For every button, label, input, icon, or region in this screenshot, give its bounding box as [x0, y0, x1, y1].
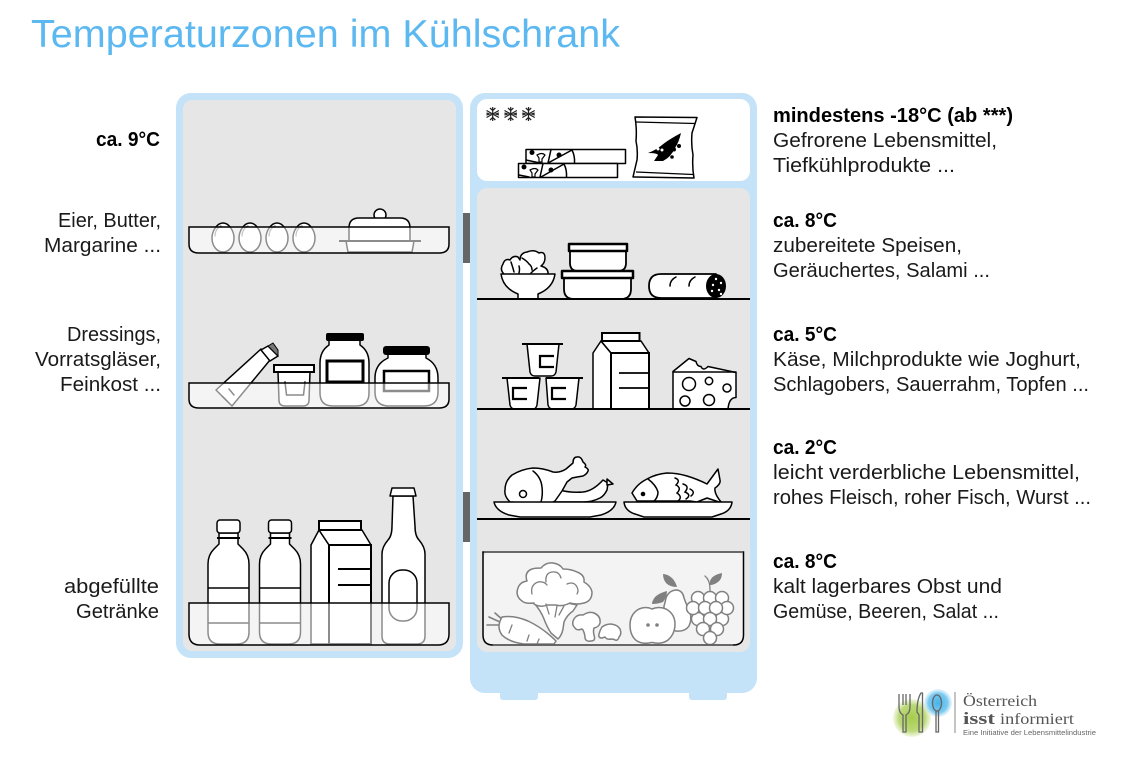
icon: yoghurt cups	[502, 344, 583, 409]
icon: carrot	[487, 613, 556, 644]
text block: dressings label	[35, 324, 161, 396]
text block: dressings label: Vorratsgläser,	[35, 349, 161, 371]
shelf tray	[189, 603, 449, 645]
shelf tray	[189, 383, 449, 408]
text block: drinks label: abgefüllte	[64, 576, 159, 598]
text block: vegetable drawer 8C: Gemüse, Beeren, Salat ...	[773, 601, 999, 623]
text block: freezer: mindestens -18°C (ab ***)	[773, 105, 1013, 127]
text block: vegetable drawer 8C: kalt lagerbares Obst und	[773, 576, 1002, 598]
logo: Österreich isst informiert: isst	[963, 709, 995, 728]
icon: bottle 1	[208, 520, 249, 644]
icon: mushrooms	[573, 612, 621, 641]
icon: food containers	[562, 244, 633, 299]
panel: fridge body	[470, 93, 757, 700]
text block: middle shelf 5C	[773, 324, 1089, 396]
text block: middle shelf 5C: Schlagobers, Sauerrahm, Topfen ...	[773, 374, 1089, 396]
icon: fish on plate	[624, 469, 732, 517]
text block: door zone 9C: ca. 9°C	[96, 129, 160, 151]
panel: fridge door	[176, 93, 463, 658]
icon: frozen pizza boxes	[518, 150, 626, 178]
text block: top shelf 8C	[773, 210, 990, 282]
shelf line: meat zone 2C	[477, 518, 750, 520]
text block: lower shelf 2C: leicht verderbliche Lebensmittel,	[773, 462, 1080, 484]
icon: milk carton	[593, 333, 649, 409]
icon: broccoli	[517, 563, 592, 639]
logo: Österreich isst informiert: Österreich	[963, 692, 1037, 710]
icon: jar tall	[320, 333, 369, 406]
text block: eggs and butter label: Eier, Butter,	[58, 210, 161, 232]
text block: freezer: Tiefkühlprodukte ...	[773, 155, 955, 177]
text block: top shelf 8C: Geräuchertes, Salami ...	[773, 260, 990, 282]
title: Temperaturzonen im Kühlschrank	[31, 13, 620, 56]
icon: glass bottle	[382, 488, 425, 644]
text block: dressings label: Dressings,	[67, 324, 161, 346]
icon: tube	[216, 343, 278, 406]
icon: milk carton	[311, 521, 371, 644]
icon: butter dish	[339, 209, 421, 252]
text block: middle shelf 5C: Käse, Milchprodukte wie Joghurt,	[773, 349, 1081, 371]
icon: meat on plate	[494, 457, 616, 517]
logo: Österreich isst informiert: Eine Initiative der Lebensmittelindustrie	[963, 728, 1096, 737]
icon: cup	[274, 365, 314, 406]
text block: eggs and butter label	[44, 210, 161, 257]
icon: door hinges	[463, 213, 470, 542]
icon: salad bowl	[501, 251, 555, 299]
icon: frozen peas bag	[633, 117, 697, 178]
icon: cheese	[673, 358, 736, 409]
text block: vegetable drawer 8C	[773, 551, 1002, 623]
text block: lower shelf 2C	[773, 437, 1091, 509]
logo: Österreich isst informiert	[893, 689, 1096, 737]
icon: salami	[649, 274, 726, 298]
text block: eggs and butter label: Margarine ...	[44, 235, 161, 257]
drawer front	[483, 552, 744, 645]
text block: top shelf 8C: ca. 8°C	[773, 210, 837, 232]
text block: drinks label: Getränke	[76, 601, 159, 623]
icon: jar wide	[375, 346, 438, 406]
icon: bottle 2	[260, 520, 300, 644]
text block: lower shelf 2C: rohes Fleisch, roher Fisch, Wurst ...	[773, 487, 1091, 509]
icon: grapes	[686, 573, 734, 644]
text block: top shelf 8C: zubereitete Speisen,	[773, 235, 962, 257]
logo: Österreich isst informiert: informiert	[1000, 711, 1075, 728]
text block: middle shelf 5C: ca. 5°C	[773, 324, 837, 346]
text block: drinks label	[64, 576, 159, 623]
shelf line: cold zone 8C	[477, 298, 750, 300]
shelf 2: tube, cup, jars	[189, 333, 449, 408]
text block: dressings label: Feinkost ...	[60, 374, 161, 396]
text block: freezer: Gefrorene Lebensmittel,	[773, 130, 997, 152]
shelf tray	[189, 227, 449, 253]
icon: apple	[630, 608, 675, 643]
text block: freezer	[773, 105, 1013, 177]
shelf 3: drinks	[189, 488, 449, 645]
icon: freezer snowflakes	[486, 107, 535, 121]
shelf line: dairy zone 5C	[477, 408, 750, 410]
text block: vegetable drawer 8C: ca. 8°C	[773, 551, 837, 573]
shelf 1: eggs and butter	[189, 209, 449, 253]
icon: eggs	[212, 223, 315, 252]
text block: lower shelf 2C: ca. 2°C	[773, 437, 837, 459]
icon: pear and leaves	[652, 574, 691, 631]
panel: vegetable drawer	[483, 552, 744, 645]
